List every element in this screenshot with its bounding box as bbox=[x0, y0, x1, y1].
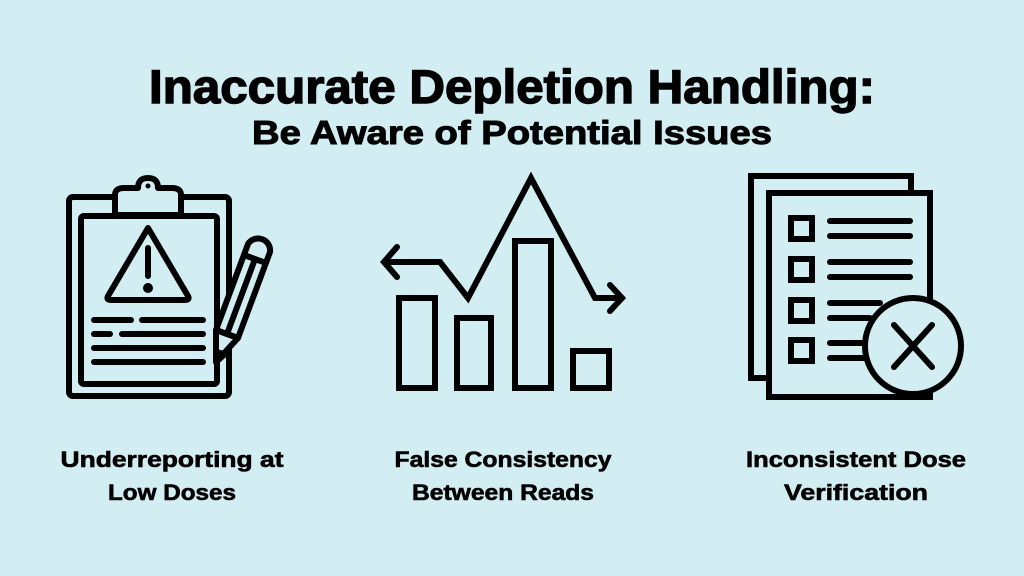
icon: clipboard with warning and pencil bbox=[69, 178, 270, 396]
icon: checklist document with X bbox=[751, 176, 961, 397]
label: underreporting bbox=[60, 447, 284, 505]
label: inconsistent dose verification: Inconsistent Dose bbox=[746, 447, 966, 472]
icon: bar chart with trend arrows bbox=[384, 178, 622, 388]
label: inconsistent dose verification: Verification bbox=[784, 480, 928, 505]
label: false consistency bbox=[394, 447, 612, 505]
label: underreporting: Underreporting at bbox=[60, 447, 284, 472]
label: inconsistent dose verification bbox=[746, 447, 966, 505]
subtitle: Be Aware of Potential Issues bbox=[252, 114, 772, 151]
title: Inaccurate Depletion Handling: bbox=[149, 60, 875, 113]
pencil body bbox=[216, 238, 270, 362]
label: underreporting: Low Doses bbox=[108, 480, 236, 505]
label: false consistency: Between Reads bbox=[412, 480, 594, 505]
label: false consistency: False Consistency bbox=[394, 447, 612, 472]
